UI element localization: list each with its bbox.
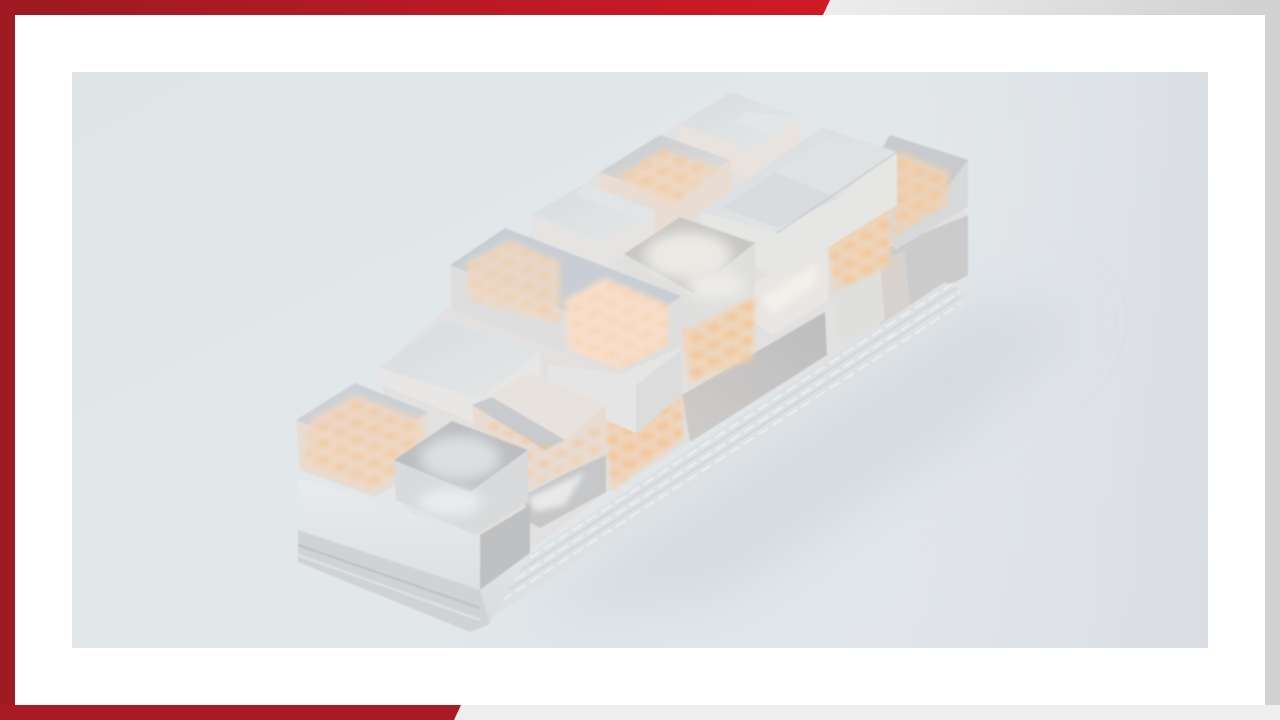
small orange cube (472, 372, 606, 490)
layered strip connector (487, 282, 966, 618)
front left orange cube (296, 383, 428, 497)
white block under long block (548, 348, 682, 433)
glowing orange column, back (825, 205, 890, 290)
cast shadow of module (607, 320, 1018, 596)
back right grey block (830, 215, 968, 345)
middle plate (532, 184, 655, 270)
long orange block (450, 228, 681, 374)
photo panel background (72, 72, 1208, 648)
base block front (298, 478, 530, 632)
large top plate (700, 127, 897, 278)
right orange cube (880, 135, 968, 250)
white cube under plate (752, 250, 828, 335)
orange column middle (682, 295, 755, 384)
lower grey brown block (682, 312, 827, 442)
module body silhouette (380, 124, 968, 590)
back orange cube (600, 135, 731, 235)
front clear cube (394, 421, 528, 535)
small grey cube behind front (525, 452, 606, 528)
back plate (679, 92, 802, 180)
module illustration (296, 92, 968, 632)
front plate (380, 320, 540, 425)
clear cube top (624, 217, 755, 328)
orange column front (605, 398, 682, 490)
